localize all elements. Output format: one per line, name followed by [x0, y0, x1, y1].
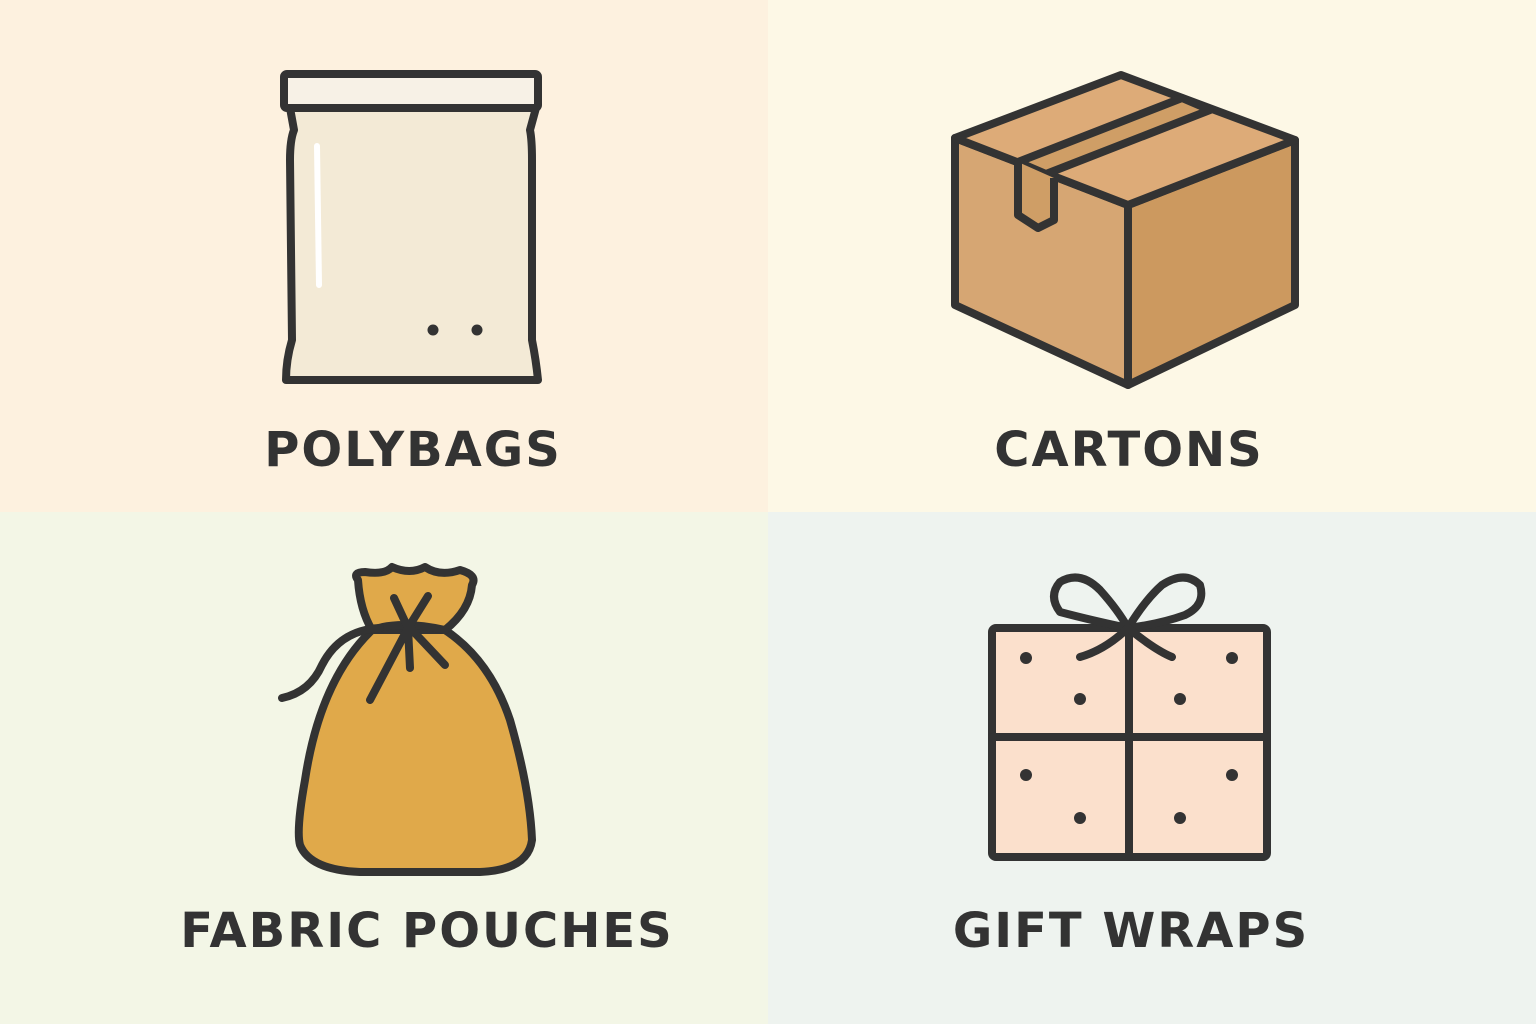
panel: fabric pouches [180, 567, 674, 959]
panel: cartons [955, 75, 1295, 478]
icon: polybag [284, 74, 538, 380]
icon: gift [992, 578, 1267, 857]
panel: gift wraps [953, 578, 1309, 959]
label: cartons: CARTONS [994, 422, 1264, 478]
icon: carton [955, 75, 1295, 385]
label: gift wraps: GIFT WRAPS [953, 903, 1309, 959]
icon: pouch [282, 567, 532, 872]
label: fabric pouches: FABRIC POUCHES [180, 903, 674, 959]
panel: polybags [264, 74, 562, 478]
label: polybags: POLYBAGS [264, 422, 562, 478]
